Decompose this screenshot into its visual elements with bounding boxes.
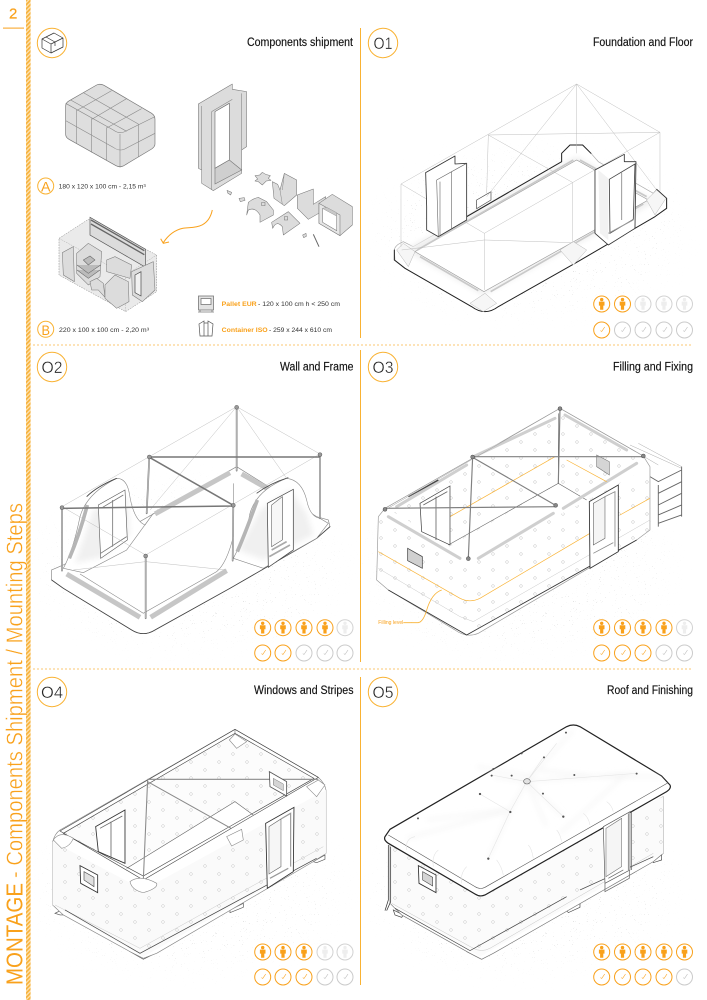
vertical sidebar title: MONTAGE: [2, 883, 28, 985]
workers needed: 4 of 5: [255, 620, 353, 636]
label A: pallet dimensions: A: [41, 178, 51, 194]
step number 03: [368, 352, 398, 382]
illustration: filled walls: [377, 407, 650, 635]
step number 01: O1: [374, 35, 392, 53]
illustration: pallet bale A: [66, 84, 155, 168]
time needed: 4 of 5: [594, 969, 692, 985]
step number 02: [37, 352, 67, 382]
step number 03: O3: [372, 359, 394, 377]
time needed: 1 of 5: [594, 322, 692, 338]
panel: step 05 roof and finishing: [368, 677, 693, 985]
callout: filling level: Filling level: [378, 620, 403, 626]
container ISO specification: Container ISO: [222, 327, 268, 334]
label A: pallet dimensions: 180 x 120 x 100 cm - 2,15 m³: [59, 184, 147, 191]
vertical sidebar title: - Components Shipment / Mounting Steps: [2, 503, 28, 878]
illustration: door frame component: [198, 84, 247, 191]
container ISO specification: - 259 x 244 x 610 cm: [269, 327, 333, 334]
arrow: components into container: [161, 210, 212, 243]
step number 02: O2: [42, 359, 62, 377]
illustration: walls and frame: [43, 405, 337, 643]
pallet EUR specification: - 120 x 100 cm h < 250 cm: [258, 301, 341, 308]
label A: pallet dimensions: [38, 178, 147, 194]
illustration: windows and stripes: [43, 729, 337, 967]
label B: container dimensions: [38, 321, 150, 338]
page number: [3, 6, 24, 29]
heading: foundation and floor: Foundation and Floor: [593, 37, 693, 49]
heading: filling and fixing: Filling and Fixing: [613, 362, 693, 374]
heading: windows and stripes: Windows and Stripes: [254, 685, 354, 697]
workers needed: 4 of 5: [594, 620, 692, 636]
panel: step 04 windows and stripes: [37, 677, 354, 985]
heading: roof and finishing: Roof and Finishing: [607, 685, 693, 697]
illustration: foundation: [383, 84, 677, 312]
panel: step 03 filling and fixing: [368, 352, 693, 661]
label B: container dimensions: B: [42, 322, 50, 338]
icon: container: [199, 321, 213, 336]
time needed: 2 of 5: [255, 645, 353, 661]
page number: 2: [9, 6, 17, 23]
heading: wall and frame: Wall and Frame: [280, 362, 354, 374]
container ISO specification: [222, 327, 333, 334]
workers needed: 3 of 5: [255, 944, 353, 960]
label B: container dimensions: 220 x 100 x 100 cm - 2,20 m³: [59, 327, 150, 334]
workers needed: 2 of 5: [594, 296, 692, 312]
icon: parcel box: [37, 28, 67, 58]
panel: step 02 wall and frame: [37, 352, 354, 661]
illustration: container load B: [59, 217, 157, 312]
time needed: 3 of 5: [594, 645, 692, 661]
pallet EUR specification: [222, 301, 341, 308]
panel: step 01 foundation and floor: [368, 28, 693, 338]
icon: pallet: [198, 296, 214, 312]
panel: components shipment: [37, 28, 354, 338]
step number 05: [368, 677, 398, 707]
time needed: 3 of 5: [255, 969, 353, 985]
step number 05: O5: [372, 684, 394, 702]
step number 04: O4: [41, 684, 63, 702]
pallet EUR specification: Pallet EUR: [222, 301, 257, 308]
heading: components shipment: Components shipment: [247, 37, 354, 49]
step number 01: [368, 28, 398, 58]
step number 04: [37, 677, 67, 707]
sidebar stripe: [26, 0, 31, 1000]
callout: filling level: [378, 590, 442, 626]
workers needed: 5 of 5: [594, 944, 692, 960]
illustration: scaffold stairs: [373, 443, 682, 647]
illustration: finished shelter: [377, 725, 670, 967]
illustration: exploded components: [227, 172, 352, 247]
